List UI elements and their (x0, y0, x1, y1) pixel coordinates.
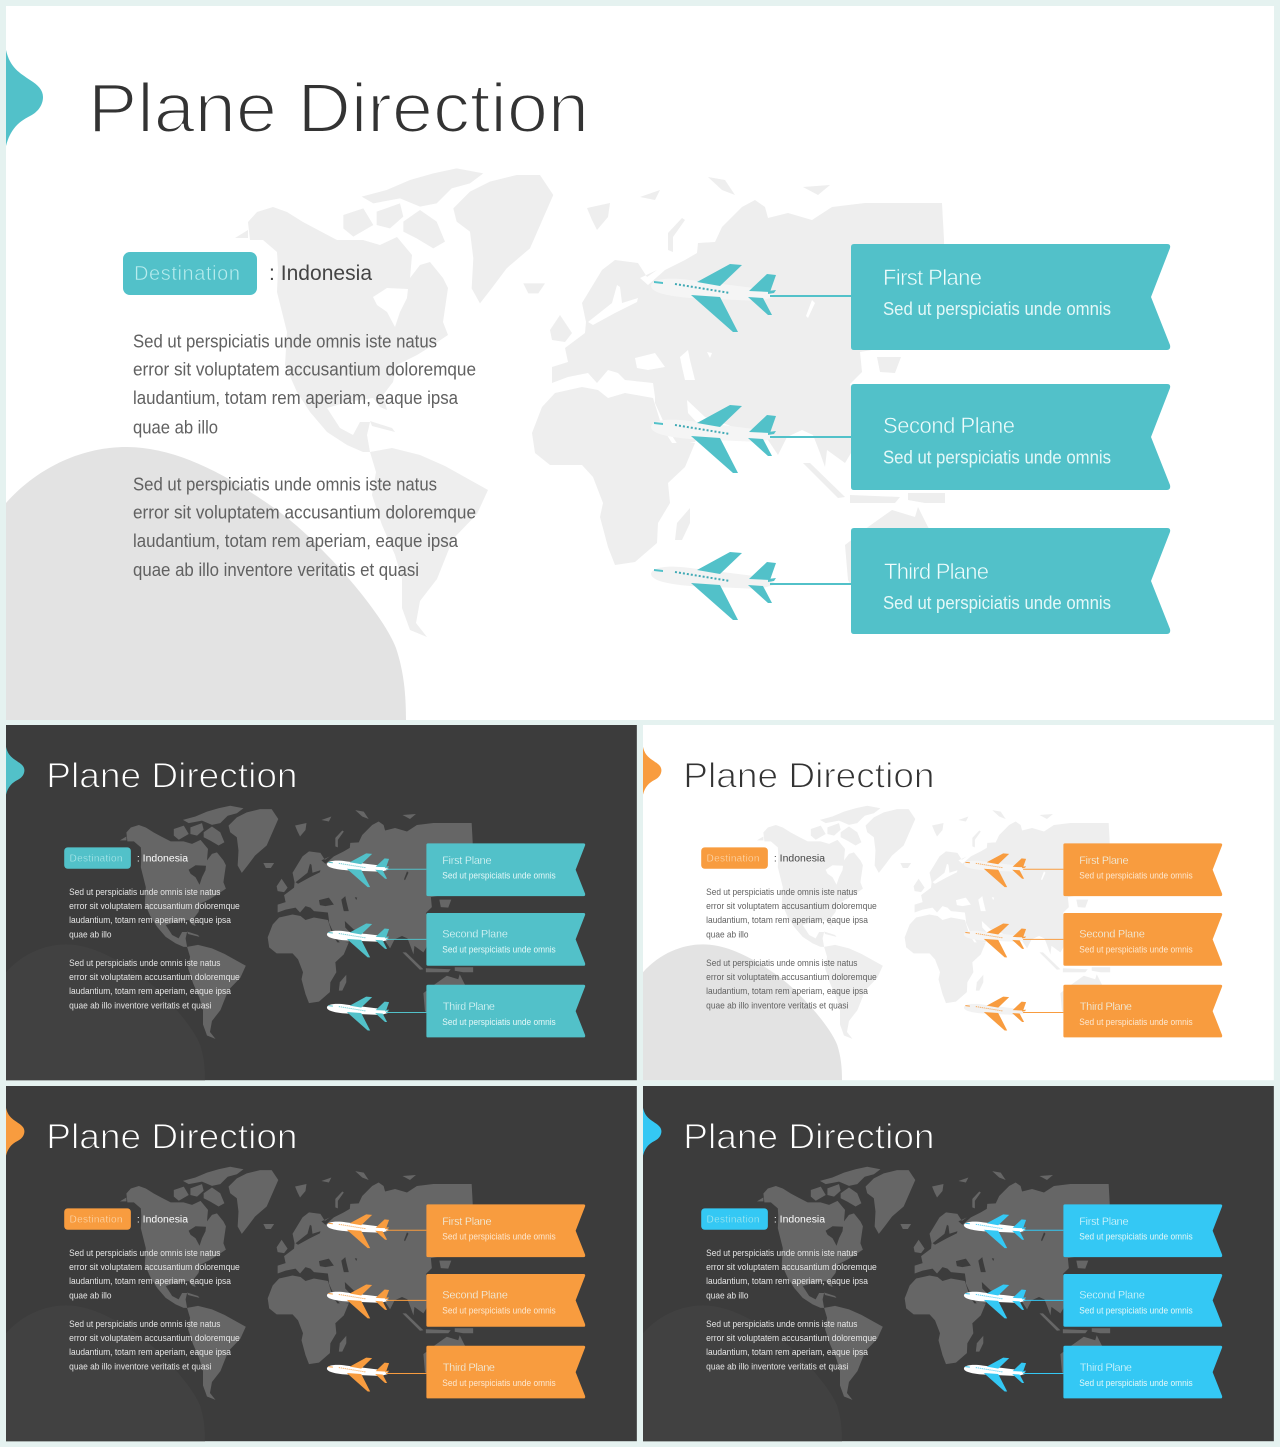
description text: quae ab illo inventore veritatis et quasi (69, 1362, 211, 1372)
banner: first plane: Sed ut perspiciatis unde omnis (442, 1232, 556, 1242)
description text: error sit voluptatem accusantium doloremque (706, 1333, 877, 1343)
icon: plane 3 (651, 552, 851, 620)
banner: second plane: Sed ut perspiciatis unde omnis (1079, 945, 1193, 955)
description text: Sed ut perspiciatis unde omnis iste natus (706, 1248, 858, 1258)
description text: laudantium, totam rem aperiam, eaque ipsa (69, 915, 231, 925)
destination label: : Indonesia (137, 853, 188, 864)
description text: quae ab illo (706, 930, 748, 940)
banner: first plane: First Plane (442, 855, 492, 867)
banner: first plane: First Plane (1079, 1216, 1129, 1228)
description text: quae ab illo (69, 1291, 111, 1301)
banner: third plane: Third Plane (443, 1001, 495, 1013)
destination label: : Indonesia (774, 853, 825, 864)
description text: Sed ut perspiciatis unde omnis iste natus (706, 1319, 858, 1329)
icon: plane 3 (327, 997, 426, 1030)
description text: laudantium, totam rem aperiam, eaque ipsa (706, 1347, 868, 1357)
description text: quae ab illo inventore veritatis et quasi (133, 560, 419, 580)
banner: second plane: Second Plane (1079, 928, 1145, 940)
description text: quae ab illo inventore veritatis et quasi (706, 1001, 848, 1011)
description text: laudantium, totam rem aperiam, eaque ipsa (69, 1276, 231, 1286)
panel: light slide, orange (643, 725, 1274, 1080)
banner: second plane: Second Plane (883, 413, 1015, 438)
icon: plane 1 (327, 853, 426, 887)
panel: main light slide, teal (6, 6, 1274, 720)
description text: error sit voluptatem accusantium doloremque (133, 360, 476, 380)
banner: second plane (426, 913, 585, 966)
description text: error sit voluptatem accusantium doloremque (706, 901, 877, 911)
banner: second plane (1063, 1274, 1222, 1327)
title: Plane Direction (46, 1118, 298, 1157)
description text: quae ab illo (706, 1291, 748, 1301)
icon: plane 2 (651, 405, 851, 473)
banner: second plane (426, 1274, 585, 1327)
description text: error sit voluptatem accusantium doloremque (69, 972, 240, 982)
description text: laudantium, totam rem aperiam, eaque ipsa (69, 1347, 231, 1357)
description text (706, 887, 877, 1011)
banner: second plane (1063, 913, 1222, 966)
banner: third plane: Sed ut perspiciatis unde omnis (883, 593, 1111, 613)
banner: third plane: Third Plane (884, 559, 989, 584)
icon: plane 1 (651, 264, 851, 332)
destination label (64, 847, 188, 869)
title tab (643, 1108, 661, 1156)
banner: third plane: Third Plane (443, 1362, 495, 1374)
banner: third plane (426, 985, 585, 1037)
title: Plane Direction (683, 757, 935, 796)
banner: first plane: First Plane (1079, 855, 1129, 867)
icon: plane 1 (964, 853, 1063, 887)
banner: first plane: Sed ut perspiciatis unde omnis (883, 299, 1111, 319)
destination label (64, 1208, 188, 1230)
banner: second plane: Sed ut perspiciatis unde omnis (442, 945, 556, 955)
banner: first plane: Sed ut perspiciatis unde omnis (1079, 871, 1193, 881)
title: Plane Direction (88, 69, 589, 147)
panel: dark slide, blue (643, 1086, 1274, 1441)
banner: third plane (1063, 985, 1222, 1037)
banner: second plane: Second Plane (1079, 1289, 1145, 1301)
description text: Sed ut perspiciatis unde omnis iste natus (706, 958, 858, 968)
banner: third plane: Sed ut perspiciatis unde omnis (1079, 1017, 1193, 1027)
description text: Sed ut perspiciatis unde omnis iste natus (706, 887, 858, 897)
description text: error sit voluptatem accusantium doloremque (69, 1262, 240, 1272)
banner: second plane: Sed ut perspiciatis unde omnis (1079, 1306, 1193, 1316)
description text: laudantium, totam rem aperiam, eaque ipsa (133, 531, 459, 551)
description text: error sit voluptatem accusantium doloremque (706, 1262, 877, 1272)
description text: quae ab illo inventore veritatis et quasi (69, 1001, 211, 1011)
world map (235, 168, 960, 637)
destination label: Destination (707, 853, 759, 864)
banner: second plane: Sed ut perspiciatis unde omnis (442, 1306, 556, 1316)
description text (133, 332, 476, 580)
banner: first plane: First Plane (442, 1216, 492, 1228)
description text: quae ab illo (69, 930, 111, 940)
description text: Sed ut perspiciatis unde omnis iste natus (133, 332, 437, 352)
description text: quae ab illo (133, 418, 218, 438)
icon: plane 3 (964, 1358, 1063, 1391)
banner: third plane: Third Plane (1080, 1001, 1132, 1013)
icon: plane 2 (327, 1285, 426, 1318)
banner: second plane: Second Plane (442, 928, 508, 940)
destination label: : Indonesia (137, 1214, 188, 1225)
world map (757, 806, 1118, 1039)
world map (120, 1167, 481, 1400)
destination label: Destination (707, 1214, 759, 1225)
destination label (701, 847, 825, 869)
description text: Sed ut perspiciatis unde omnis iste natus (69, 1319, 221, 1329)
background circle shape (6, 447, 406, 720)
banner: first plane: Sed ut perspiciatis unde omnis (1079, 1232, 1193, 1242)
icon: plane 2 (327, 924, 426, 957)
destination label: : Indonesia (774, 1214, 825, 1225)
description text: laudantium, totam rem aperiam, eaque ipsa (133, 388, 459, 408)
icon: plane 2 (964, 924, 1063, 957)
description text (706, 1248, 877, 1372)
title: Plane Direction (683, 1118, 935, 1157)
destination label: : Indonesia (269, 262, 372, 285)
world map (120, 806, 481, 1039)
banner: first plane (1063, 843, 1222, 896)
destination label: Destination (70, 853, 122, 864)
description text: error sit voluptatem accusantium doloremque (133, 502, 476, 522)
description text: laudantium, totam rem aperiam, eaque ipsa (706, 915, 868, 925)
destination label (123, 252, 372, 295)
banner: first plane (851, 244, 1170, 350)
description text: error sit voluptatem accusantium doloremque (69, 901, 240, 911)
title: Plane Direction (46, 757, 298, 796)
banner: third plane: Third Plane (1080, 1362, 1132, 1374)
description text: laudantium, totam rem aperiam, eaque ipsa (706, 1276, 868, 1286)
banner: first plane: Sed ut perspiciatis unde omnis (442, 871, 556, 881)
description text: laudantium, totam rem aperiam, eaque ipsa (69, 986, 231, 996)
description text (69, 1248, 240, 1372)
banner: third plane: Sed ut perspiciatis unde omnis (442, 1017, 556, 1027)
icon: plane 2 (964, 1285, 1063, 1318)
banner: third plane (1063, 1346, 1222, 1398)
title tab (6, 50, 43, 146)
description text: laudantium, totam rem aperiam, eaque ipsa (706, 986, 868, 996)
world map (757, 1167, 1118, 1400)
banner: third plane: Sed ut perspiciatis unde omnis (1079, 1378, 1193, 1388)
banner: first plane (1063, 1204, 1222, 1257)
background circle shape (6, 1305, 205, 1441)
title tab (6, 1108, 24, 1156)
banner: second plane (851, 384, 1170, 490)
background circle shape (643, 944, 842, 1080)
title tab (6, 747, 24, 795)
background circle shape (643, 1305, 842, 1441)
icon: plane 3 (327, 1358, 426, 1391)
banner: first plane (426, 843, 585, 896)
icon: plane 1 (964, 1214, 1063, 1248)
banner: first plane (426, 1204, 585, 1257)
description text: Sed ut perspiciatis unde omnis iste natus (69, 887, 221, 897)
icon: plane 1 (327, 1214, 426, 1248)
description text: Sed ut perspiciatis unde omnis iste natus (133, 474, 437, 494)
background circle shape (6, 944, 205, 1080)
banner: third plane (426, 1346, 585, 1398)
banner: third plane: Sed ut perspiciatis unde omnis (442, 1378, 556, 1388)
panel: dark slide, orange (6, 1086, 637, 1441)
destination label (701, 1208, 825, 1230)
description text (69, 887, 240, 1011)
description text: Sed ut perspiciatis unde omnis iste natus (69, 958, 221, 968)
banner: second plane: Sed ut perspiciatis unde omnis (883, 448, 1111, 468)
panel: dark slide, teal (6, 725, 637, 1080)
icon: plane 3 (964, 997, 1063, 1030)
banner: third plane (851, 528, 1170, 634)
destination label: Destination (134, 263, 240, 285)
destination label: Destination (70, 1214, 122, 1225)
banner: second plane: Second Plane (442, 1289, 508, 1301)
description text: quae ab illo inventore veritatis et quasi (706, 1362, 848, 1372)
description text: error sit voluptatem accusantium doloremque (69, 1333, 240, 1343)
title tab (643, 747, 661, 795)
banner: first plane: First Plane (883, 265, 982, 290)
description text: error sit voluptatem accusantium doloremque (706, 972, 877, 982)
description text: Sed ut perspiciatis unde omnis iste natus (69, 1248, 221, 1258)
